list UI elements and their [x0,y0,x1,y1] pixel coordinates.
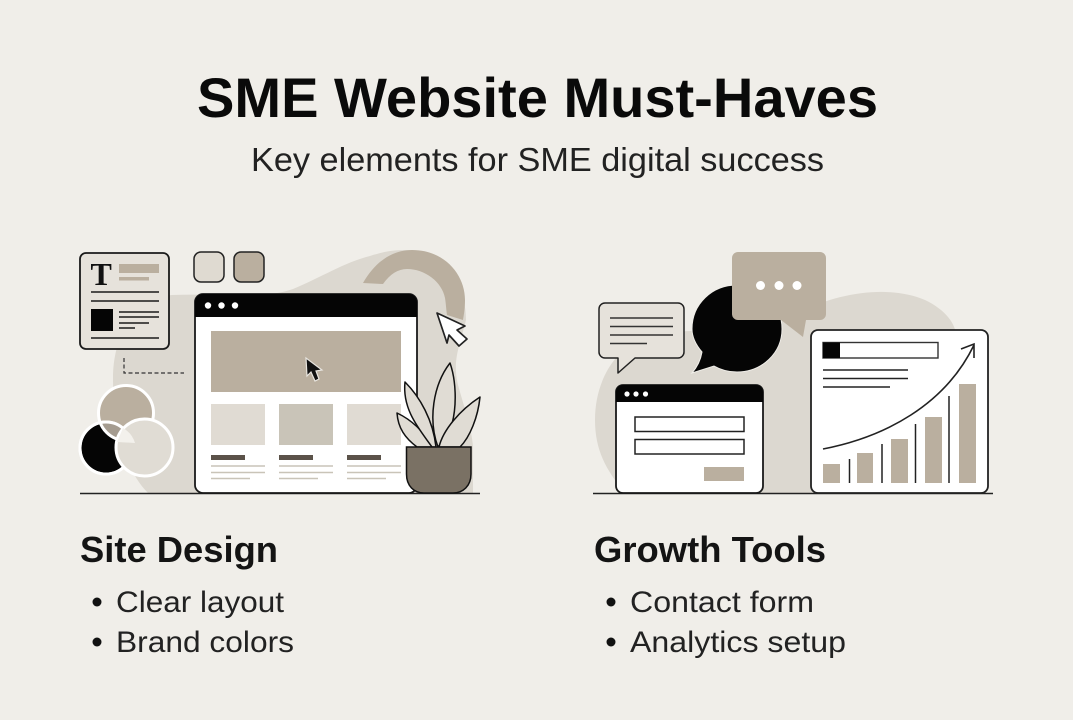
bullet list [606,586,846,659]
icon: typography card: T [90,256,112,292]
contact form window [616,385,763,493]
panel: site design illustration [80,250,480,494]
decorative arc [363,250,465,320]
panel: growth tools illustration [593,252,993,494]
bullet list: Analytics setup [630,626,846,659]
icon: colour venn diagram [80,386,173,476]
icon: white cursor [437,313,467,346]
bullet list [92,586,294,659]
infographic canvas [78,76,993,658]
submit button [704,467,744,481]
leaves [397,363,480,447]
bar chart [823,384,976,483]
text lines [823,370,908,387]
progress header [823,342,938,358]
ground line [80,492,480,494]
browser window mockup [195,294,417,493]
title: SME Website Must-Haves [197,66,878,129]
speech bubble: tan with dots [732,252,826,337]
icon: typography card [80,253,169,349]
bullet list: Clear layout [116,586,285,619]
ground line [593,492,993,494]
speech bubble: lines [599,303,684,373]
growth arrow [823,344,974,449]
hero banner [211,331,401,392]
subtitle: Key elements for SME digital success [251,141,824,178]
text block: site design [80,529,294,659]
content tiles [211,404,401,445]
heading: site design: Site Design [80,529,278,570]
bullet list: Contact form [630,586,814,619]
pot [406,447,471,493]
icon: potted plant [397,363,480,493]
bullet list: Brand colors [116,626,294,659]
speech bubble: black [692,285,782,373]
form input fields [635,417,744,454]
background blob [113,250,473,493]
dashed connector [124,358,184,373]
colour swatches [194,252,264,282]
heading: growth tools: Growth Tools [594,529,826,570]
analytics card [811,330,988,493]
icon: black cursor [306,358,322,381]
background blob [595,292,956,493]
text block: growth tools [594,529,846,659]
tile captions [211,455,401,478]
